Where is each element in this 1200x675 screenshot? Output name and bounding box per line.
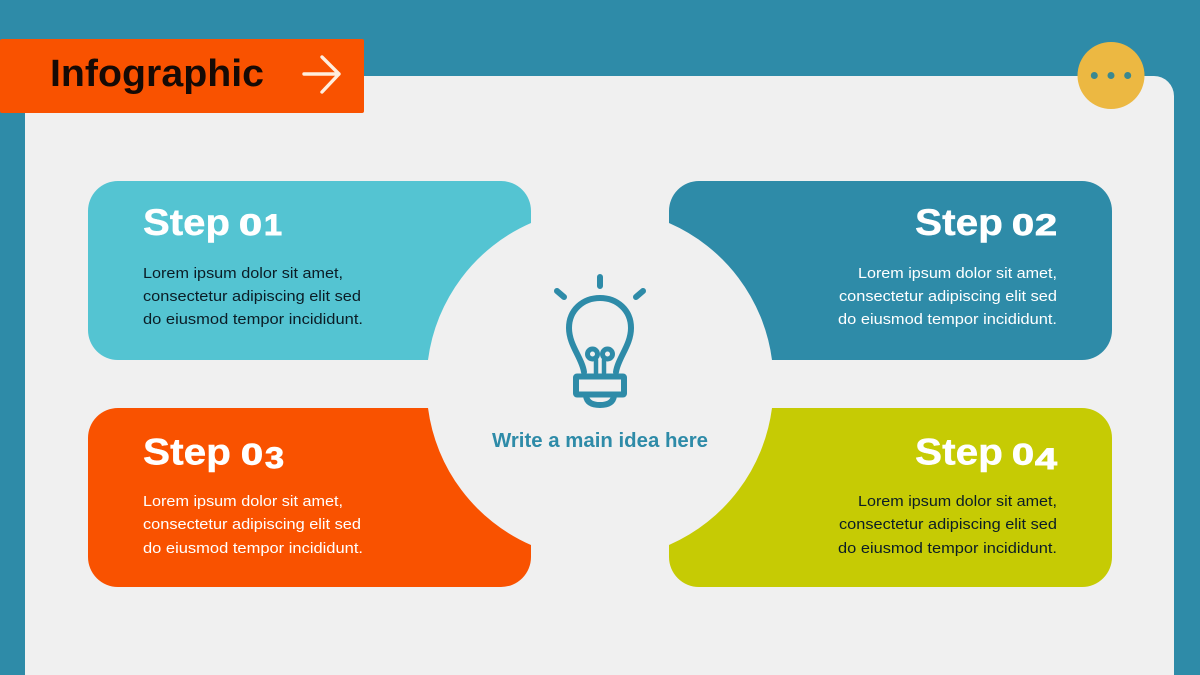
step 02 text: Lorem ipsum dolor sit amet, <box>858 265 1057 282</box>
step 01 heading: 0 <box>239 209 262 242</box>
step 04 text: consectetur adipiscing elit sed <box>839 516 1057 533</box>
step 02 text: consectetur adipiscing elit sed <box>839 288 1057 305</box>
icon: arrow <box>304 57 339 92</box>
step 01 text: do eiusmod tempor incididunt. <box>143 311 363 328</box>
step 04 text: Lorem ipsum dolor sit amet, <box>858 493 1057 510</box>
step 03 heading: 3 <box>265 442 284 475</box>
panel: step 02 <box>669 181 1112 360</box>
step 02 heading: Step <box>915 202 1003 243</box>
step 02 text: do eiusmod tempor incididunt. <box>838 311 1057 328</box>
step 01 heading: Step <box>143 202 230 243</box>
step 04 heading: 0 <box>1012 438 1034 472</box>
step 03 text: do eiusmod tempor incididunt. <box>143 540 363 557</box>
step 04 heading: Step <box>915 432 1003 472</box>
header banner <box>0 39 364 113</box>
step 01 text: consectetur adipiscing elit sed <box>143 288 361 305</box>
step 01 text: Lorem ipsum dolor sit amet, <box>143 265 343 282</box>
menu badge <box>1078 42 1144 109</box>
step 03 heading: Step <box>143 432 231 472</box>
panel: step 03 <box>88 408 531 587</box>
step 03 text: Lorem ipsum dolor sit amet, <box>143 493 343 510</box>
panel: step 04 <box>669 408 1112 587</box>
icon: three dots <box>1091 72 1131 79</box>
step 03 text: consectetur adipiscing elit sed <box>143 516 361 533</box>
step 04 heading: 4 <box>1035 443 1057 476</box>
step 04 text: do eiusmod tempor incididunt. <box>838 540 1057 557</box>
step 01 text <box>143 265 363 328</box>
step 04 text <box>838 493 1057 557</box>
step 02 text <box>838 265 1057 328</box>
main idea caption: Write a main idea here <box>492 430 708 452</box>
step 03 text <box>143 493 363 557</box>
step 02 heading: 0 <box>1012 209 1034 242</box>
step 03 heading: 0 <box>241 438 263 472</box>
panel: step 01 <box>88 181 531 360</box>
step 02 heading: 2 <box>1035 209 1057 242</box>
step 01 heading: 1 <box>264 209 282 242</box>
icon: light bulb <box>557 277 643 405</box>
heading: Infographic: Infographic <box>50 53 264 95</box>
